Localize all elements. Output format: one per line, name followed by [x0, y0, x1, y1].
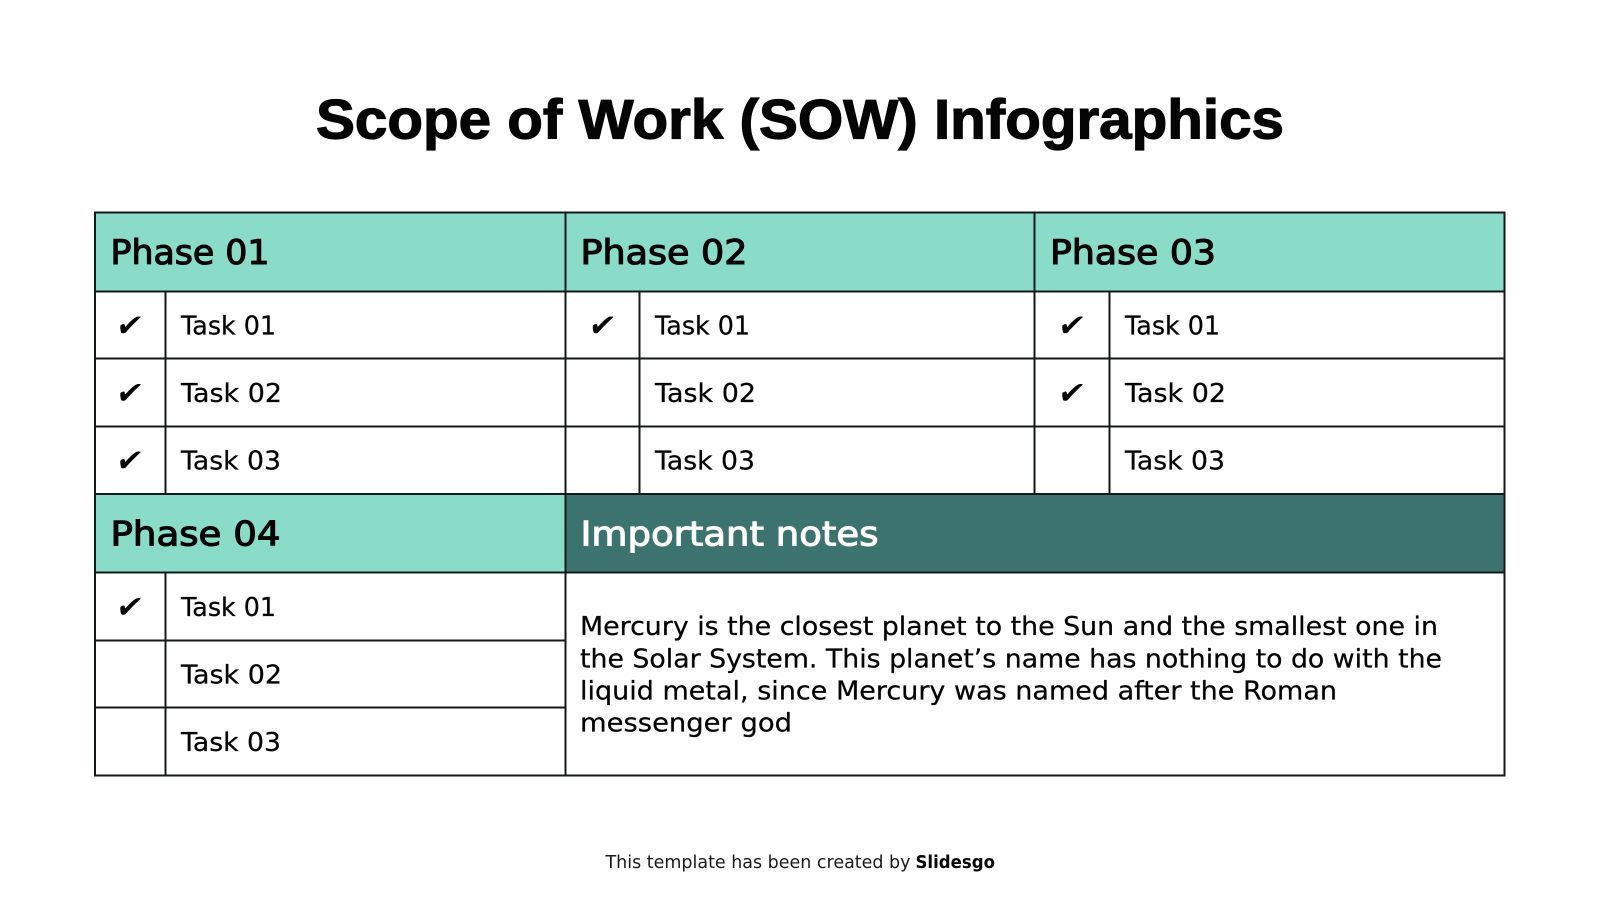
- task rows: phase 04: Task 02: [180, 660, 282, 690]
- task rows: phase 02: ✔: [586, 308, 618, 344]
- task rows: phase 02: Task 01: [654, 311, 750, 341]
- task rows: phase 02: [586, 308, 756, 476]
- text block: notes body: liquid metal, since Mercury was named after the Roman: [580, 676, 1337, 706]
- task rows: phase 01: Task 02: [180, 379, 282, 409]
- text block: notes body: Mercury is the closest planet to the Sun and the smallest one in: [580, 612, 1438, 642]
- task rows: phase 01: ✔: [114, 376, 146, 411]
- heading: phase 03: Phase 03: [1050, 233, 1216, 272]
- heading: important notes: [566, 494, 1504, 572]
- heading: phase 03: [1034, 212, 1504, 292]
- panel: phase 02: [566, 212, 1034, 476]
- task rows: phase 01: Task 03: [180, 446, 281, 476]
- panel: important notes: [566, 494, 1504, 738]
- task rows: phase 01: Task 01: [180, 311, 276, 341]
- title: Scope of Work (SOW) Infographics: [316, 88, 1284, 150]
- task rows: phase 03: ✔: [1056, 376, 1088, 411]
- heading: phase 01: Phase 01: [110, 233, 270, 272]
- panel: phase 01: [95, 212, 566, 479]
- task rows: phase 02: Task 02: [654, 379, 756, 409]
- task rows: phase 04: Task 03: [180, 728, 281, 758]
- heading: phase 01: [95, 212, 566, 292]
- panel: phase 04: [95, 494, 566, 758]
- task rows: phase 01: ✔: [114, 443, 146, 479]
- text block: notes body: the Solar System. This planet’s name has nothing to do with the: [580, 644, 1442, 674]
- task rows: phase 04: [114, 590, 282, 758]
- task rows: phase 04: ✔: [114, 590, 146, 625]
- heading: phase 04: [95, 494, 566, 572]
- task rows: phase 01: ✔: [114, 308, 146, 344]
- task rows: phase 01: [114, 308, 282, 479]
- heading: phase 04: Phase 04: [110, 514, 280, 554]
- text block: notes body: [580, 612, 1442, 738]
- task rows: phase 03: [1056, 308, 1226, 476]
- panel: phase 03: [1034, 212, 1504, 476]
- task rows: phase 03: ✔: [1056, 308, 1088, 344]
- task rows: phase 02: Task 03: [654, 446, 755, 476]
- task rows: phase 03: Task 03: [1124, 446, 1225, 476]
- footer credit: Slidesgo: [916, 853, 995, 873]
- heading: phase 02: Phase 02: [580, 233, 748, 272]
- text block: notes body: messenger god: [580, 708, 792, 738]
- task rows: phase 03: Task 02: [1124, 379, 1226, 409]
- footer credit: This template has been created by: [605, 853, 910, 873]
- heading: phase 02: [566, 212, 1034, 292]
- heading: important notes: Important notes: [580, 514, 878, 554]
- panel: phase table: [95, 212, 1504, 776]
- task rows: phase 03: Task 01: [1124, 311, 1220, 341]
- task rows: phase 04: Task 01: [180, 593, 276, 623]
